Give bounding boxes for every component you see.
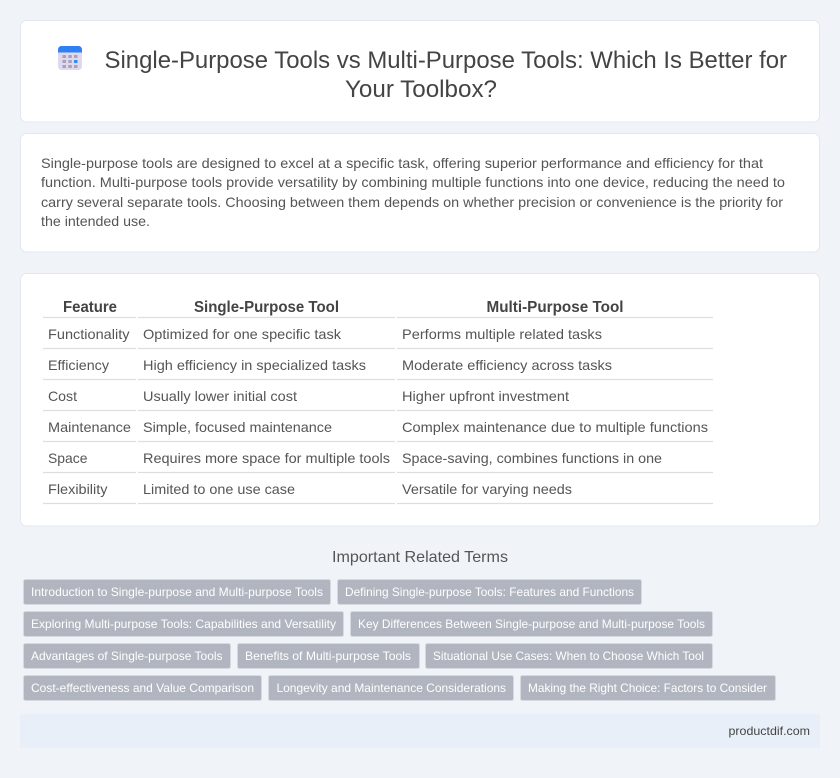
title bbox=[104, 47, 787, 103]
footer source text: productdif.com bbox=[728, 724, 810, 738]
tags: related terms: Benefits of Multi-purpose Tools bbox=[245, 649, 411, 663]
text: description paragraph: function. Multi-purpose tools provide versatility by combining multiple functions into one device, reducing the need to bbox=[41, 174, 785, 190]
table row: flexibility bbox=[48, 481, 572, 497]
table header row: Multi-Purpose Tool bbox=[486, 299, 624, 316]
table row: efficiency: Moderate efficiency across tasks bbox=[402, 357, 612, 373]
table row: space: Space-saving, combines functions in one bbox=[402, 450, 662, 466]
table row: functionality: Functionality bbox=[48, 326, 130, 342]
table row: space: Requires more space for multiple tools bbox=[143, 450, 390, 466]
table row: maintenance: Complex maintenance due to multiple functions bbox=[402, 419, 708, 435]
text: description paragraph: the intended use. bbox=[41, 213, 150, 229]
panel: header bbox=[20, 20, 820, 122]
tags: related terms: Key Differences Between Single-purpose and Multi-purpose Tools bbox=[358, 617, 705, 631]
tags: related terms: Cost-effectiveness and Value Comparison bbox=[31, 681, 254, 695]
table row: efficiency: Efficiency bbox=[48, 357, 109, 373]
tags: related terms bbox=[24, 580, 776, 700]
table row: cost: Higher upfront investment bbox=[402, 388, 569, 404]
tags: related terms: Situational Use Cases: When to Choose Which Tool bbox=[433, 649, 704, 663]
table header row: Feature bbox=[63, 299, 117, 316]
table row: flexibility: Versatile for varying needs bbox=[402, 481, 572, 497]
table row: space bbox=[48, 450, 662, 466]
text: description paragraph: carry several separate tools. Choosing between them depends on whether precision or convenience is the priority for bbox=[41, 194, 783, 210]
table header row: Single-Purpose Tool bbox=[194, 299, 339, 316]
table row: functionality bbox=[48, 326, 602, 342]
table row: cost: Cost bbox=[48, 388, 77, 404]
tags: related terms: Defining Single-purpose Tools: Features and Functions bbox=[345, 585, 634, 599]
tags: related terms: Making the Right Choice: Factors to Consider bbox=[528, 681, 767, 695]
table row: maintenance: Simple, focused maintenance bbox=[143, 419, 332, 435]
panel: comparison table bbox=[20, 274, 820, 526]
icon: calendar bbox=[58, 46, 82, 70]
tags: related terms: Advantages of Single-purpose Tools bbox=[31, 649, 222, 663]
text: description paragraph: Single-purpose tools are designed to excel at a specific task, offering superior performance and efficiency for that bbox=[41, 155, 763, 171]
table row: cost bbox=[48, 388, 569, 404]
table row: flexibility: Limited to one use case bbox=[143, 481, 295, 497]
table row: efficiency: High efficiency in specialized tasks bbox=[143, 357, 366, 373]
panel: description bbox=[20, 134, 820, 252]
table row: maintenance bbox=[48, 419, 708, 435]
tags: related terms: Introduction to Single-purpose and Multi-purpose Tools bbox=[31, 585, 323, 599]
table row: maintenance: Maintenance bbox=[48, 419, 131, 435]
table row: efficiency bbox=[48, 357, 612, 373]
table row: functionality: Performs multiple related tasks bbox=[402, 326, 602, 342]
text: description paragraph bbox=[41, 155, 785, 229]
table row: flexibility: Flexibility bbox=[48, 481, 108, 497]
table row: cost: Usually lower initial cost bbox=[143, 388, 297, 404]
tags: related terms: Longevity and Maintenance Considerations bbox=[276, 681, 506, 695]
title: Your Toolbox? bbox=[345, 76, 497, 103]
heading: related terms: Important Related Terms bbox=[332, 549, 508, 566]
table row: space: Space bbox=[48, 450, 88, 466]
footer bbox=[20, 714, 820, 748]
table row: functionality: Optimized for one specific task bbox=[143, 326, 342, 342]
title: Single-Purpose Tools vs Multi-Purpose Tools: Which Is Better for bbox=[104, 47, 787, 74]
table header row bbox=[63, 299, 624, 316]
tags: related terms: Exploring Multi-purpose Tools: Capabilities and Versatility bbox=[31, 617, 336, 631]
